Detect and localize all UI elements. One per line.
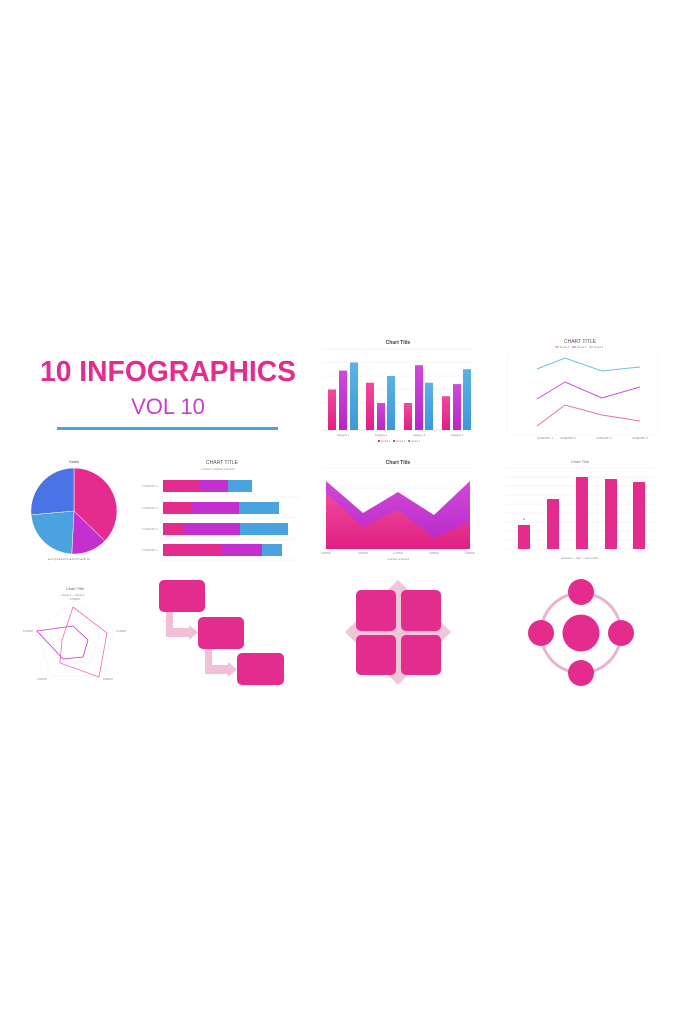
chart: stacked horizontal bar: CHART TITLE <box>206 460 239 466</box>
chart: stacked horizontal bar <box>142 460 300 560</box>
chart: area <box>321 460 475 561</box>
chart: area: ● Series1 ● Series2 <box>387 558 410 561</box>
diagram: process steps <box>159 580 284 685</box>
chart: column combo: ■ Volume ― High ― Low ● Close <box>561 557 599 560</box>
chart: pie: ■ 1st Qtr ■ 2nd Qtr ■ 3rd Qtr ■ 4th Qtr <box>48 558 90 561</box>
chart: line: Series 3 <box>594 346 604 349</box>
chart: radar: 1/8/2002 <box>103 678 113 681</box>
chart: radar: 1/9/2002 <box>37 678 47 681</box>
title: 10 INFOGRAPHICS <box>40 356 296 388</box>
chart: line <box>507 339 658 440</box>
diagram: hub circles <box>528 579 634 686</box>
chart: stacked horizontal bar: CATEGORY 3 <box>142 507 159 510</box>
chart: area: 1/7/2002 <box>393 552 403 555</box>
chart: area: 1/6/2002 <box>358 552 368 555</box>
chart: clustered bar: Series 1 <box>381 440 391 443</box>
chart: pie: Sales <box>69 459 79 464</box>
chart: line: CATEGORY 3 <box>596 437 613 440</box>
chart: radar <box>23 586 126 681</box>
chart: clustered bar: Category 3 <box>413 434 426 437</box>
chart: line: CATEGORY 2 <box>560 437 577 440</box>
chart: radar: 1/6/2002 <box>70 598 80 601</box>
chart: radar: 1/7/2002 <box>116 630 126 633</box>
chart: clustered bar: Category 1 <box>337 434 350 437</box>
chart: clustered bar: Series 3 <box>411 440 421 443</box>
chart: area: Chart Title <box>386 460 411 466</box>
chart: clustered bar: Category 2 <box>375 434 388 437</box>
title <box>40 356 296 419</box>
chart: clustered bar <box>322 340 474 443</box>
chart: line: Series 1 <box>560 346 570 349</box>
chart: line: Series 2 <box>577 346 587 349</box>
arrow 2 <box>205 649 237 677</box>
chart: line: CHART TITLE <box>564 339 597 345</box>
chart: area: 1/5/2002 <box>321 552 331 555</box>
chart: radar: Chart Title <box>66 586 85 591</box>
chart: stacked horizontal bar: CATEGORY 2 <box>142 528 159 531</box>
chart: line: CATEGORY 1 <box>537 437 554 440</box>
chart: area: 1/9/2002 <box>465 552 475 555</box>
subtitle: VOL 10 <box>131 394 205 419</box>
diagram: quad squares <box>345 580 451 685</box>
chart: clustered bar: Series 2 <box>396 440 406 443</box>
chart: column combo <box>505 459 655 560</box>
chart: stacked horizontal bar: CATEGORY 1 <box>142 549 159 552</box>
arrow 1 <box>166 612 198 640</box>
chart: line: CATEGORY 4 <box>632 437 649 440</box>
chart: area: 1/8/2002 <box>429 552 439 555</box>
chart: clustered bar: Chart Title <box>386 340 411 346</box>
chart: radar: — Series 1 — Series 2 <box>59 594 85 597</box>
chart: clustered bar: Category 4 <box>451 434 464 437</box>
chart: stacked horizontal bar: CATEGORY 4 <box>142 485 159 488</box>
chart: column combo: Chart Title <box>571 459 590 464</box>
chart: radar: 1/5/2002 <box>23 630 33 633</box>
chart: stacked horizontal bar: ● Series1 ● Series2 ● Series3 <box>201 468 235 471</box>
chart: pie <box>31 459 117 561</box>
